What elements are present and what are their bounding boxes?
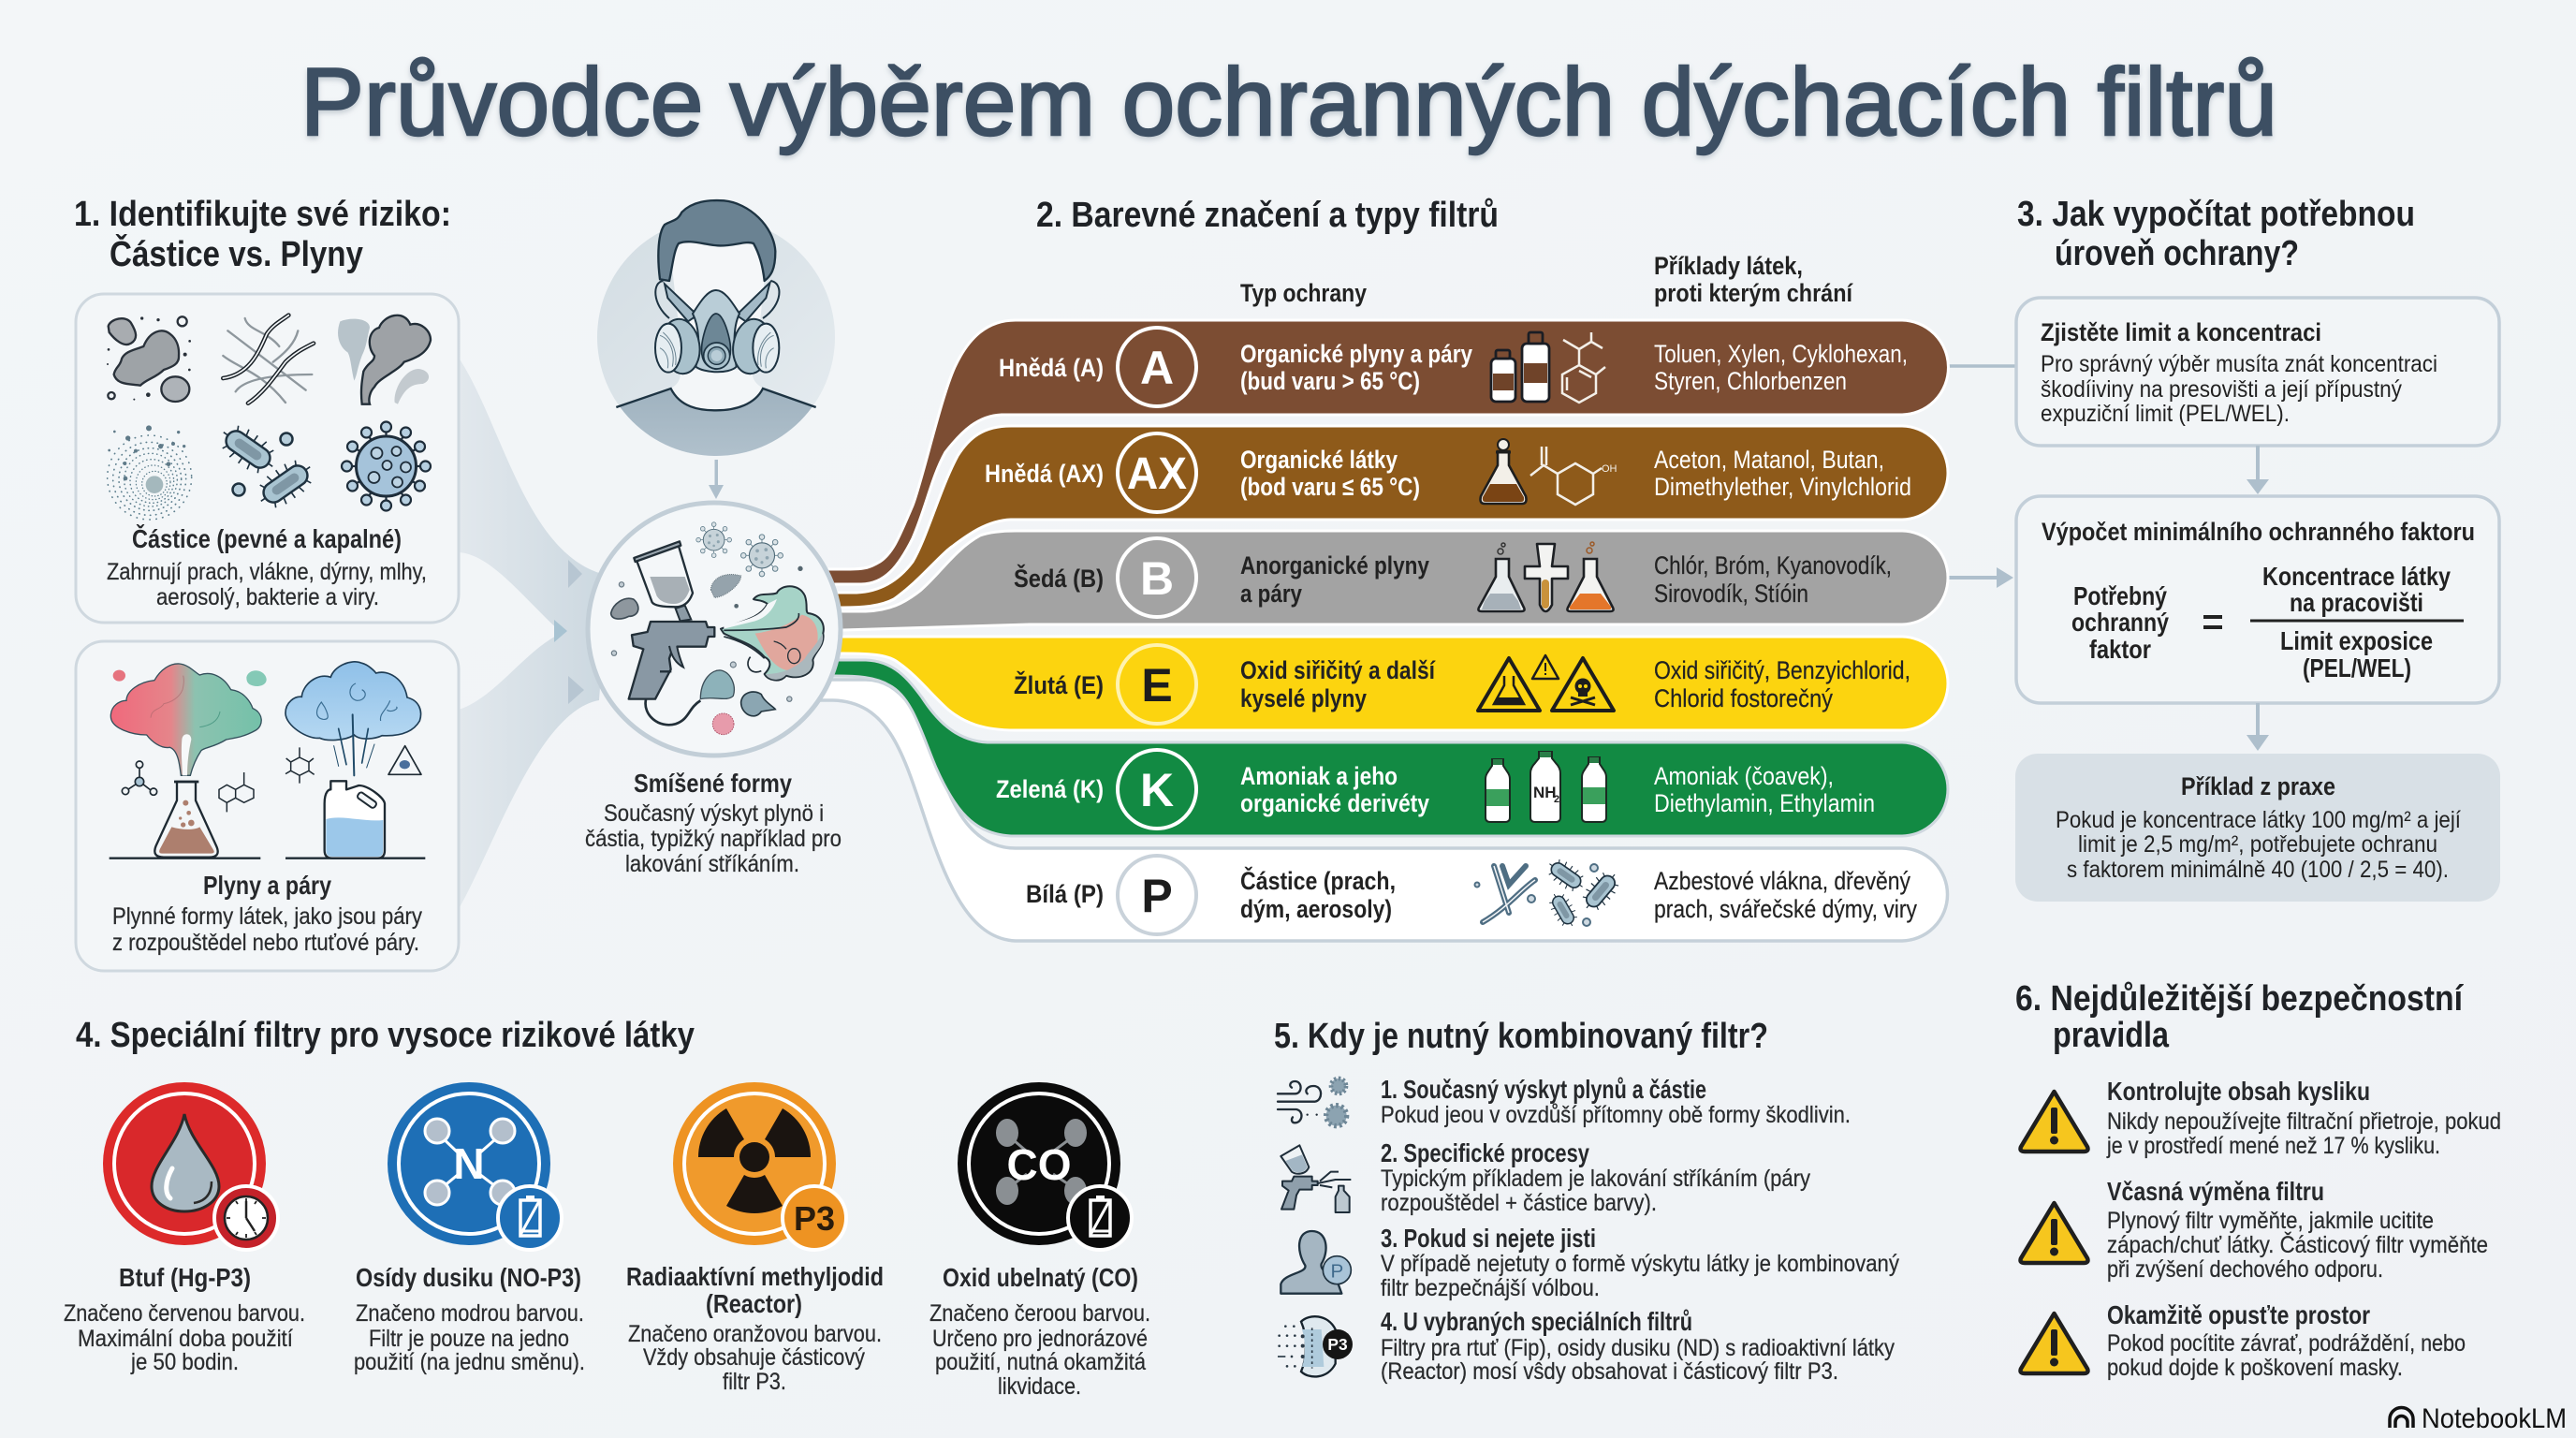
text: replacement rule: při zvýšení dechového odporu. — [2107, 1256, 2383, 1283]
text: P protection type: Částice (prach, — [1240, 866, 1396, 895]
heading: examples column: Příklady látek, — [1654, 252, 1803, 280]
item: mercury — [64, 1082, 305, 1375]
icon: fibres — [223, 315, 314, 404]
text: item 4: 4. U vybraných speciálních filtrů — [1381, 1307, 1692, 1336]
text: mercury description: je 50 bodin. — [130, 1349, 239, 1375]
text: B protection type: Anorganické plyny — [1240, 551, 1429, 580]
text: B protection type: a páry — [1240, 580, 1302, 608]
badge: AX: AX — [1127, 449, 1187, 499]
text: K examples: Amoniak (čoavek), — [1654, 762, 1834, 790]
text: radioactive title: Radiaaktívní methyljodid — [626, 1262, 884, 1291]
band: brown A — [814, 320, 1948, 584]
text: A examples: Toluen, Xylen, Cyklohexan, — [1654, 340, 1908, 368]
text: leave area rule: pokud dojde k poškovení masky. — [2107, 1355, 2403, 1381]
text: mixed forms description: částia, typižký například pro — [585, 826, 842, 852]
text: gases description: Plynné formy látek, jako jsou páry — [112, 903, 422, 930]
icon: orange radiation filter — [673, 1082, 846, 1250]
text: P examples — [1654, 867, 1917, 923]
connector lines to calculation — [1948, 366, 2018, 588]
text: mixed forms description: Současný výskyt plynö i — [604, 800, 824, 827]
icon: orange radiation filter: P3 — [794, 1199, 835, 1238]
text: nitrogen description: Filtr je pouze na jedno — [369, 1326, 569, 1352]
text: leave area rule: Pokod pocítite závrať, podráždění, nebo — [2107, 1330, 2466, 1357]
badge: A — [1118, 328, 1196, 406]
band: white P — [814, 680, 1947, 941]
text: mercury description: Maximální doba použití — [78, 1326, 293, 1352]
formula: fraction: (PEL/WEL) — [2303, 653, 2411, 682]
text: E protection type — [1240, 656, 1436, 712]
arrow: head from particles — [568, 560, 582, 588]
text: item 3 — [1381, 1224, 1899, 1301]
text: mixed forms description: lakování stříkáním. — [625, 851, 799, 877]
text: mixed forms description — [585, 800, 842, 877]
box: practical example: Pokud je koncentrace látky 100 mg/m² a její — [2056, 807, 2461, 833]
heading: examples column: proti kterým chrání — [1654, 279, 1853, 307]
text: item 4: Filtry pra rtuť (Fip), osidy dusiku (ND) s radioaktivní látky — [1381, 1335, 1895, 1361]
formula: left side — [2071, 581, 2169, 664]
item: nitrogen oxides — [354, 1082, 585, 1375]
icon: filter with P3 badge — [1278, 1316, 1353, 1376]
text: item 2: Typickým příkladem je lakování stříkáním (páry — [1381, 1166, 1810, 1192]
icon: ammonia bottles — [1486, 752, 1606, 822]
icon: ammonia bottles: NH — [1533, 784, 1557, 801]
heading: section 4: 4. Speciální filtry pro vysoce rizikové látky — [76, 1016, 695, 1055]
text: oxygen rule: Kontrolujte obsah kysliku — [2107, 1077, 2370, 1106]
text: radioactive description: Vždy obsahuje částicový — [643, 1344, 865, 1371]
text: E protection type: kyselé plyny — [1240, 684, 1367, 712]
icon: bottles and molecule — [1491, 332, 1605, 403]
text: P examples: Azbestové vlákna, dřevěný — [1654, 867, 1910, 895]
badge: E — [1118, 645, 1196, 724]
formula: fraction: na pracovišti — [2290, 588, 2423, 617]
badge: A: A — [1140, 342, 1174, 394]
heading: section 5: 5. Kdy je nutný kombinovaný filtr? — [1274, 1017, 1768, 1056]
arrow: head centre — [554, 620, 567, 642]
text: A protection type — [1240, 340, 1472, 395]
icon: warning oxygen — [2020, 1092, 2087, 1152]
text: K protection type: Amoniak a jeho — [1240, 762, 1398, 790]
icon: flask and molecule: OH — [1602, 463, 1617, 475]
band: yellow E — [814, 637, 1948, 730]
text: replacement rule: Plynový filtr vyměňte, jakmile ucitite — [2107, 1208, 2434, 1234]
icon: warning replacement — [2020, 1203, 2087, 1263]
formula: equals sign — [2203, 615, 2222, 629]
box: practical example — [2015, 754, 2500, 902]
arrow: mask to mixed forms — [709, 460, 724, 499]
band: grey B — [814, 531, 1948, 630]
text: B protection type — [1240, 551, 1429, 608]
panel: gases and vapours — [76, 641, 459, 971]
box: practical example: s faktorem minimálně 40 (100 / 2,5 = 40). — [2067, 857, 2449, 883]
heading: examples column — [1654, 252, 1853, 307]
text: replacement rule: Včasná výměna filtru — [2107, 1177, 2324, 1206]
label: Žlutá (E): Žlutá (E) — [1014, 670, 1104, 699]
box: practical example: limit je 2,5 mg/m², potřebujete ochranu — [2078, 831, 2437, 858]
text: CO description: Značeno čeroou barvou. — [929, 1300, 1150, 1327]
item: radioactive methyl iodide — [626, 1082, 884, 1395]
icon: hazard triangles — [1478, 655, 1614, 711]
text: leave area rule: Okamžitě opusťte prostor — [2107, 1300, 2370, 1329]
icon: person with question: P — [1330, 1260, 1343, 1282]
panel: safety rules — [2015, 979, 2501, 1381]
panel: particles — [76, 294, 459, 623]
text: CO description: likvidace. — [998, 1373, 1081, 1400]
text: P protection type — [1240, 866, 1396, 923]
text: nitrogen description — [354, 1300, 585, 1375]
text: item 1: Pokud jeou v ovzdůší přítomny obě formy škodlivin. — [1381, 1102, 1851, 1128]
text: item 2: rozpouštědel + částice barvy). — [1381, 1190, 1657, 1216]
text: AX examples: Dimethylether, Vinylchlorid — [1654, 473, 1911, 501]
text: replacement rule: zápach/chuť látky. Částicový filtr vyměňte — [2107, 1231, 2488, 1258]
box: limit and concentration: Pro správný výběr musíta znát koncentraci — [2041, 351, 2437, 377]
text: radioactive title: (Reactor) — [706, 1289, 802, 1318]
formula: left side: ochranný — [2071, 608, 2169, 637]
heading: section 2: 2. Barevné značení a typy filtrů — [1036, 196, 1499, 235]
text: oxygen rule: je v prostředí mené než 17 % kysliku. — [2106, 1133, 2440, 1159]
badge: E: E — [1141, 659, 1173, 712]
panel: special filters — [64, 1016, 1150, 1400]
text: item 4: (Reactor) mosí vŝdy obsahovat i částicový filtr P3. — [1381, 1358, 1838, 1385]
text: AX protection type: Organické látky — [1240, 446, 1398, 474]
text: gases description: z rozpouštědel nebo rtuťové páry. — [112, 930, 419, 956]
box: minimum protection factor: Výpočet minimálního ochranného faktoru — [2042, 518, 2475, 546]
text: mercury description — [64, 1300, 305, 1375]
panel: colour coded filter bands — [814, 196, 2018, 941]
arrow: funnel from particles card — [459, 358, 604, 646]
icon: red mercury filter — [103, 1082, 278, 1250]
panel: mixed forms — [585, 503, 842, 877]
icon: fibres and bacteria — [1475, 855, 1624, 931]
text: item 3: 3. Pokud si nejete jisti — [1381, 1224, 1596, 1253]
box: minimum protection factor — [2016, 496, 2499, 703]
label: Zelená (K): Zelená (K) — [996, 775, 1104, 803]
text: replacement rule — [2107, 1177, 2488, 1283]
text: item 1: 1. Současný výskyt plynů a částie — [1381, 1075, 1706, 1104]
arrow: head from gases — [568, 676, 584, 704]
text: CO title: Oxid ubelnatý (CO) — [943, 1263, 1138, 1292]
icon: mist — [108, 425, 192, 520]
heading: section 3 — [2017, 195, 2415, 273]
formula: fraction: Limit exposice — [2280, 626, 2433, 655]
band: green K — [814, 660, 1948, 836]
label: Hnědá (A): Hnědá (A) — [999, 354, 1104, 382]
formula: left side: Potřebný — [2073, 581, 2167, 610]
icon: blue nitrogen filter — [388, 1082, 562, 1250]
icon: black CO filter — [958, 1082, 1132, 1250]
icon: smoke — [338, 315, 431, 404]
label: Hnědá (AX): Hnědá (AX) — [985, 460, 1104, 488]
text: mercury description: Značeno červenou barvou. — [64, 1300, 305, 1327]
box: limit and concentration — [2016, 298, 2499, 446]
text: item 3: V případě nejetuty o formě výskytu látky je kombinovaný — [1381, 1251, 1899, 1277]
text: B examples — [1654, 551, 1892, 608]
icon: lab glassware — [1478, 542, 1614, 611]
heading: section 6 — [2015, 979, 2464, 1055]
text: CO description: Určeno pro jednorázové — [932, 1326, 1148, 1352]
badge: P — [1118, 856, 1196, 934]
icon: small spray gun — [1281, 1145, 1351, 1212]
label: Šedá (B): Šedá (B) — [1014, 564, 1104, 593]
icon: black CO filter: CO — [1007, 1140, 1071, 1189]
panel: calculation — [2015, 195, 2500, 902]
icon: flask with coloured cloud — [110, 664, 267, 858]
text: particles description: Zahrnují prach, vlákne, dýrny, mlhy, — [107, 559, 427, 585]
heading: section 1: 1. Identifikujte své riziko: — [74, 195, 451, 234]
text: radioactive description: Značeno oranžovou barvou. — [628, 1321, 882, 1347]
icon: flask and molecule — [1481, 439, 1617, 505]
icon: filter with P3 badge: P3 — [1327, 1335, 1348, 1354]
text: A examples — [1654, 340, 1908, 395]
text: gases description — [112, 903, 422, 956]
text: A examples: Styren, Chlorbenzen — [1654, 367, 1847, 395]
icon: wind and particles — [1278, 1078, 1347, 1126]
arrow: step two to three — [2247, 703, 2269, 751]
text: A protection type: (bud varu > 65 °C) — [1240, 367, 1420, 395]
box: practical example: Příklad z praxe — [2181, 772, 2335, 800]
text: A protection type: Organické plyny a páry — [1240, 340, 1472, 368]
icon: blue nitrogen filter: N — [453, 1139, 485, 1188]
arrow: funnel from gases card — [459, 633, 604, 909]
text: E examples — [1654, 656, 1910, 712]
text: particles description: aerosolý, bakterie a viry. — [156, 584, 379, 610]
text: nitrogen description: použití (na jednu směnu). — [354, 1349, 585, 1375]
panel: combined filter — [1274, 1017, 1899, 1385]
icon: spray gun in circle — [588, 503, 841, 756]
text: E examples: Oxid siřičitý, Benzyichlorid, — [1654, 656, 1910, 684]
icon: virus — [342, 421, 431, 511]
icon: ammonia bottles: 2 — [1554, 794, 1559, 805]
text: item 2: 2. Specifické procesy — [1381, 1138, 1589, 1167]
text: item 4 — [1381, 1307, 1895, 1385]
heading: section 1 — [74, 195, 451, 274]
text: item 1 — [1381, 1075, 1851, 1128]
text: K examples — [1654, 762, 1875, 817]
text: particles title: Částice (pevné a kapalné) — [132, 523, 402, 553]
text: particles description — [107, 559, 427, 610]
text: nitrogen title: Osídy dusiku (NO-P3) — [356, 1263, 581, 1292]
text: mercury title: Btuf (Hg-P3) — [119, 1263, 251, 1292]
text: AX protection type: (bod varu ≤ 65 °C) — [1240, 473, 1420, 501]
text: mixed forms title: Smíšené formy — [634, 769, 792, 798]
heading: section 6: pravidla — [2053, 1016, 2170, 1055]
label: Bílá (P): Bílá (P) — [1026, 880, 1104, 908]
formula: fraction — [2250, 562, 2464, 682]
box: limit and concentration: expuziční limit (PEL/WEL). — [2041, 401, 2290, 427]
text: CO description: použití, nutná okamžitá — [935, 1349, 1146, 1375]
icon: person wearing respirator — [597, 200, 835, 466]
text: P examples: prach, svářečské dýmy, viry — [1654, 895, 1917, 923]
text: radioactive description — [628, 1321, 882, 1395]
text: E protection type: Oxid siřičitý a další — [1240, 656, 1436, 684]
badge: B: B — [1140, 552, 1174, 605]
text: B examples: Sirovodík, Stíóin — [1654, 580, 1808, 608]
heading: section 1: Částice vs. Plyny — [110, 232, 363, 274]
text: oxygen rule — [2106, 1077, 2501, 1159]
text: item 2 — [1381, 1138, 1810, 1216]
arrow: step one to two — [2247, 446, 2269, 494]
icon: warning leave area — [2020, 1313, 2087, 1373]
text: oxygen rule: Nikdy nepoužívejte filtrační přietroje, pokud — [2107, 1108, 2501, 1135]
panel: risk identification — [74, 195, 604, 971]
text: E examples: Chlorid fostorečný — [1654, 684, 1833, 712]
text: P protection type: dým, aerosoly) — [1240, 895, 1392, 923]
text: nitrogen description: Značeno modrou barvou. — [356, 1300, 584, 1327]
text: radioactive description: filtr P3. — [723, 1369, 786, 1395]
icon: person with question — [1281, 1231, 1351, 1294]
box: limit and concentration: škodíiviny na presovišti a její přípustný — [2041, 376, 2402, 403]
heading: section 3: 3. Jak vypočítat potřebnou — [2017, 195, 2415, 234]
formula: fraction: Koncentrace látky — [2262, 562, 2451, 591]
text: AX examples — [1654, 446, 1911, 501]
item: carbon monoxide — [929, 1082, 1150, 1400]
formula: left side: faktor — [2089, 635, 2151, 664]
text: AX protection type — [1240, 446, 1420, 501]
box: limit and concentration: Zjistěte limit a koncentraci — [2041, 318, 2321, 346]
text: K protection type — [1240, 762, 1429, 817]
icon: dust — [107, 316, 191, 402]
text: K examples: Diethylamin, Ethylamin — [1654, 789, 1875, 817]
badge: AX — [1118, 433, 1196, 512]
badge: K: K — [1140, 764, 1174, 816]
icon: bacteria — [213, 418, 320, 515]
heading: section 3: úroveň ochrany? — [2055, 234, 2299, 273]
badge: K — [1118, 750, 1196, 829]
text: leave area rule — [2107, 1300, 2466, 1381]
title: Průvodce výběrem ochranných dýchacích filtrů — [300, 49, 2277, 155]
badge: P: P — [1141, 870, 1173, 922]
badge: B — [1118, 538, 1196, 617]
text: K protection type: organické derivéty — [1240, 789, 1429, 817]
text: CO description — [929, 1300, 1150, 1400]
text: gases title: Plyny a páry — [203, 871, 331, 900]
text: AX examples: Aceton, Matanol, Butan, — [1654, 446, 1884, 474]
band: brown AX — [814, 426, 1948, 608]
icon: solvent jug with blue cloud — [285, 662, 425, 858]
heading: section 6: 6. Nejdůležitější bezpečnostní — [2015, 979, 2464, 1019]
text: B examples: Chlór, Bróm, Kyanovodík, — [1654, 551, 1892, 580]
heading: protection type column: Typ ochrany — [1240, 279, 1367, 307]
text: radioactive title — [626, 1262, 884, 1318]
text: item 3: filtr bezpečnájší vólbou. — [1381, 1275, 1600, 1301]
